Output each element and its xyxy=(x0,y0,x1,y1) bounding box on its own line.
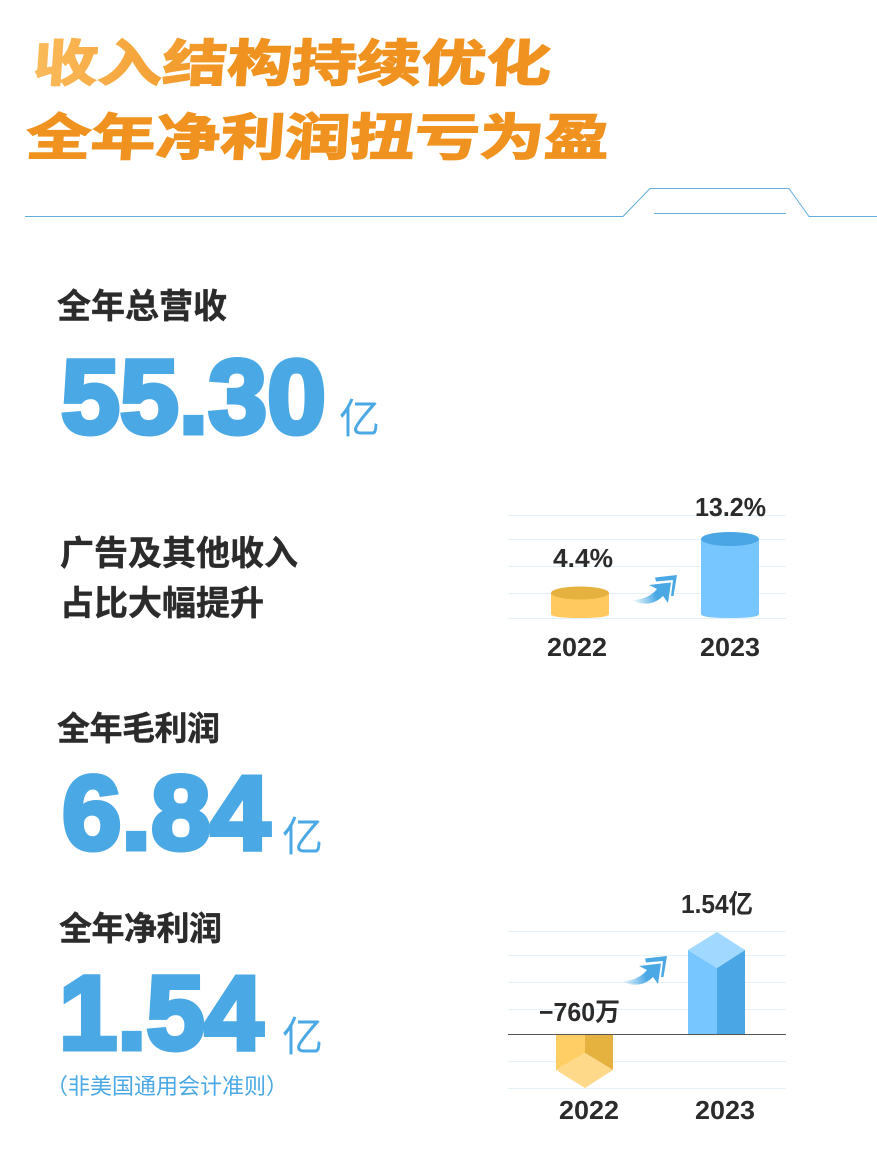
value: 1.54亿: 1.54亿 xyxy=(681,889,753,919)
section: total revenue xyxy=(57,288,380,456)
unit: 亿: 亿 xyxy=(282,1014,323,1060)
footnote: non-GAAP: （非美国通用会计准则） xyxy=(46,1074,288,1099)
chart: net profit xyxy=(508,889,786,1125)
unit: 亿: 亿 xyxy=(282,814,323,860)
big number: 55.30: 55.30 xyxy=(61,339,326,456)
year: 2023: 2023 xyxy=(700,632,760,662)
icon: growth arrow xyxy=(621,956,667,985)
year: 2023: 2023 xyxy=(695,1095,755,1125)
title: 收入结构持续优化 xyxy=(31,36,553,92)
title xyxy=(24,36,611,166)
section: net profit xyxy=(46,910,323,1099)
text block: ad revenue share xyxy=(60,535,298,623)
year: 2022: 2022 xyxy=(547,632,607,662)
heading: total revenue: 全年总营收 xyxy=(57,288,227,326)
bar: 2022 xyxy=(556,1035,613,1088)
text block: ad revenue share: 占比大幅提升 xyxy=(60,585,264,623)
icon: growth arrow xyxy=(631,575,677,604)
chart: ad revenue share xyxy=(508,492,786,662)
bar: 2023 xyxy=(688,932,745,1034)
cylinder: 2022 xyxy=(551,586,609,618)
heading: gross profit: 全年毛利润 xyxy=(57,710,220,747)
section: gross profit xyxy=(57,710,323,872)
value: 13.2%: 13.2% xyxy=(695,492,766,522)
cylinder: 2023 xyxy=(701,532,759,618)
value: 4.4%: 4.4% xyxy=(553,543,613,573)
big number: 6.84: 6.84 xyxy=(62,755,270,872)
value: -760万: −760万 xyxy=(539,997,620,1027)
heading: net profit: 全年净利润 xyxy=(59,910,222,947)
title: 全年净利润扭亏为盈 xyxy=(24,110,611,166)
year: 2022: 2022 xyxy=(559,1095,619,1125)
axis line xyxy=(508,1034,786,1036)
big number: 1.54: 1.54 xyxy=(59,955,263,1072)
header divider line xyxy=(25,188,877,216)
unit: 亿: 亿 xyxy=(339,396,380,442)
text block: ad revenue share: 广告及其他收入 xyxy=(60,535,298,573)
